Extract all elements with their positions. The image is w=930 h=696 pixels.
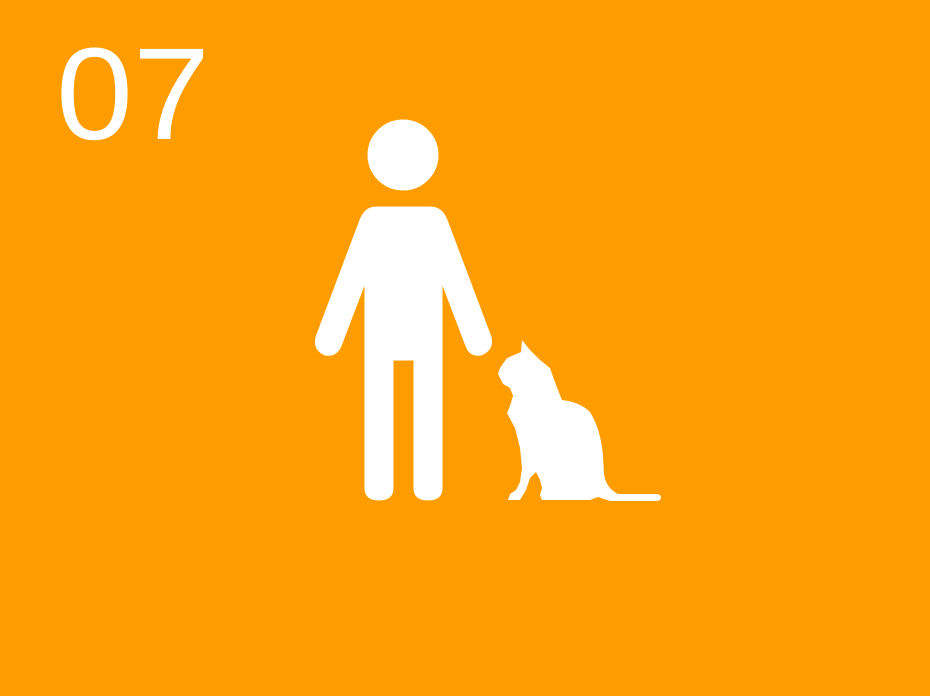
icon: cat	[498, 340, 661, 501]
title: number 07: 07	[56, 20, 210, 167]
icon: person	[315, 120, 492, 500]
